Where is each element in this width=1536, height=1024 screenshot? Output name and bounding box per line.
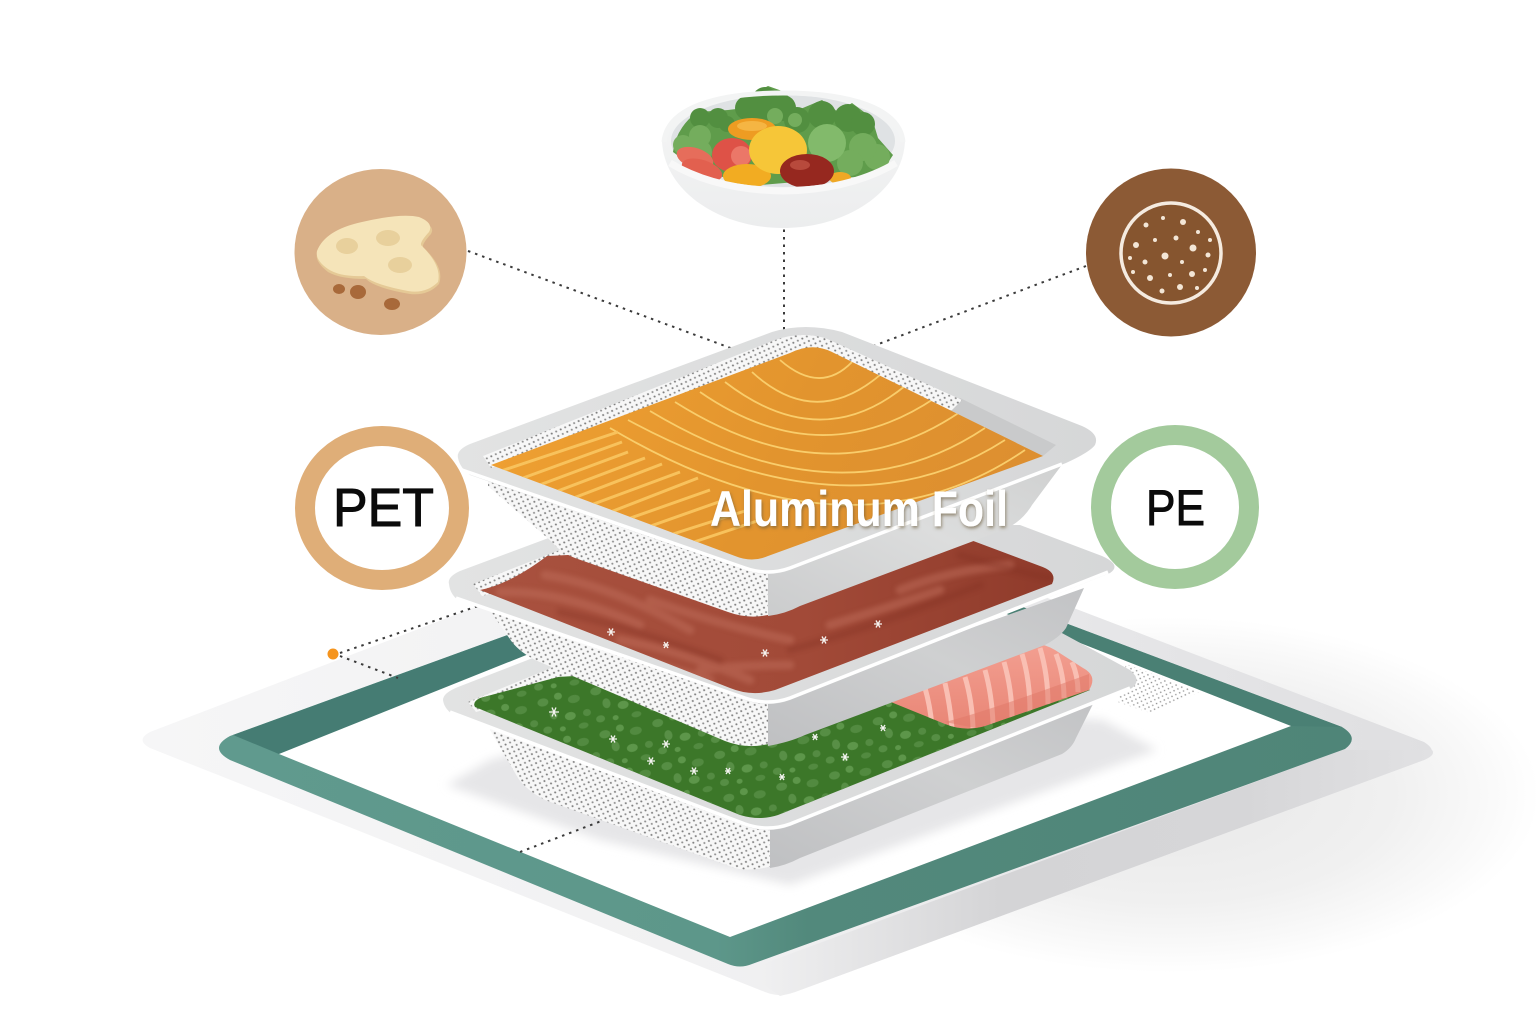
icon: brown spice circle: [1086, 168, 1256, 336]
halftone patch: [1118, 664, 1200, 713]
tray: bottom layer, spinach and salmon: [443, 632, 1137, 870]
PE label: PE: [1146, 480, 1205, 536]
greens mass: [673, 86, 893, 185]
bowl outer: [662, 91, 905, 228]
PET label: PET: [333, 478, 434, 538]
inner wall, gray side: [950, 398, 1056, 456]
salad: [673, 86, 893, 188]
salmon slice: [892, 645, 1092, 729]
icon: salad bowl: [662, 86, 905, 228]
board: base mat with teal frame: [142, 493, 1433, 996]
tray right wall: [768, 462, 1064, 616]
tray: top layer, orange salmon: [458, 327, 1096, 617]
bowl inside: [671, 95, 895, 187]
pale base: [142, 493, 1432, 995]
icon: cheese circle: [294, 169, 466, 335]
inner white sheet: [279, 539, 1291, 937]
rim highlight: [456, 572, 1108, 702]
spinach fill: [474, 676, 1090, 818]
cheese holes: [336, 238, 358, 254]
orange fill with grain lines: [491, 347, 1043, 560]
tray rim: [458, 327, 1096, 574]
inner well dots at left corner: [468, 648, 620, 712]
orange marker dot: [328, 648, 338, 660]
rim highlight: [462, 464, 1062, 572]
inner well dots at left corner: [473, 546, 580, 596]
badge: PET: [305, 436, 459, 580]
cheese shadow: [317, 218, 440, 294]
brown disc: [1086, 168, 1256, 336]
tray left wall: [488, 465, 772, 617]
label: Aluminum Foil: Aluminum Foil: [710, 481, 1008, 537]
tray left wall: [488, 590, 772, 746]
crumbs: [333, 284, 345, 294]
tan disc: [294, 169, 466, 335]
tray rim: [449, 525, 1114, 704]
tray rim: [443, 632, 1137, 830]
dotted leader lines: [340, 222, 1086, 852]
tray: middle layer, red meat: [449, 525, 1114, 746]
tray left wall: [490, 712, 772, 870]
green ring: [1101, 435, 1249, 579]
sparkles: [549, 708, 886, 780]
tan ring: [305, 436, 459, 580]
shadow under trays: [447, 700, 1157, 885]
inner well dots on upper sides: [483, 335, 962, 468]
teal frame bands: [219, 526, 1352, 966]
darker lower edge of base: [740, 750, 1433, 996]
soft ground shadow: [800, 617, 1536, 973]
sparkles: [607, 620, 882, 656]
bowl rim highlight: [670, 163, 896, 191]
tray right wall: [768, 588, 1084, 746]
rim highlight: [450, 688, 1130, 828]
badge: PE: [1101, 435, 1249, 579]
meat fill with grain: [480, 541, 1054, 694]
tray right wall: [770, 700, 1095, 868]
inner dish: [1121, 203, 1221, 303]
cheese top: [317, 216, 439, 292]
spice specks: [1128, 216, 1212, 294]
